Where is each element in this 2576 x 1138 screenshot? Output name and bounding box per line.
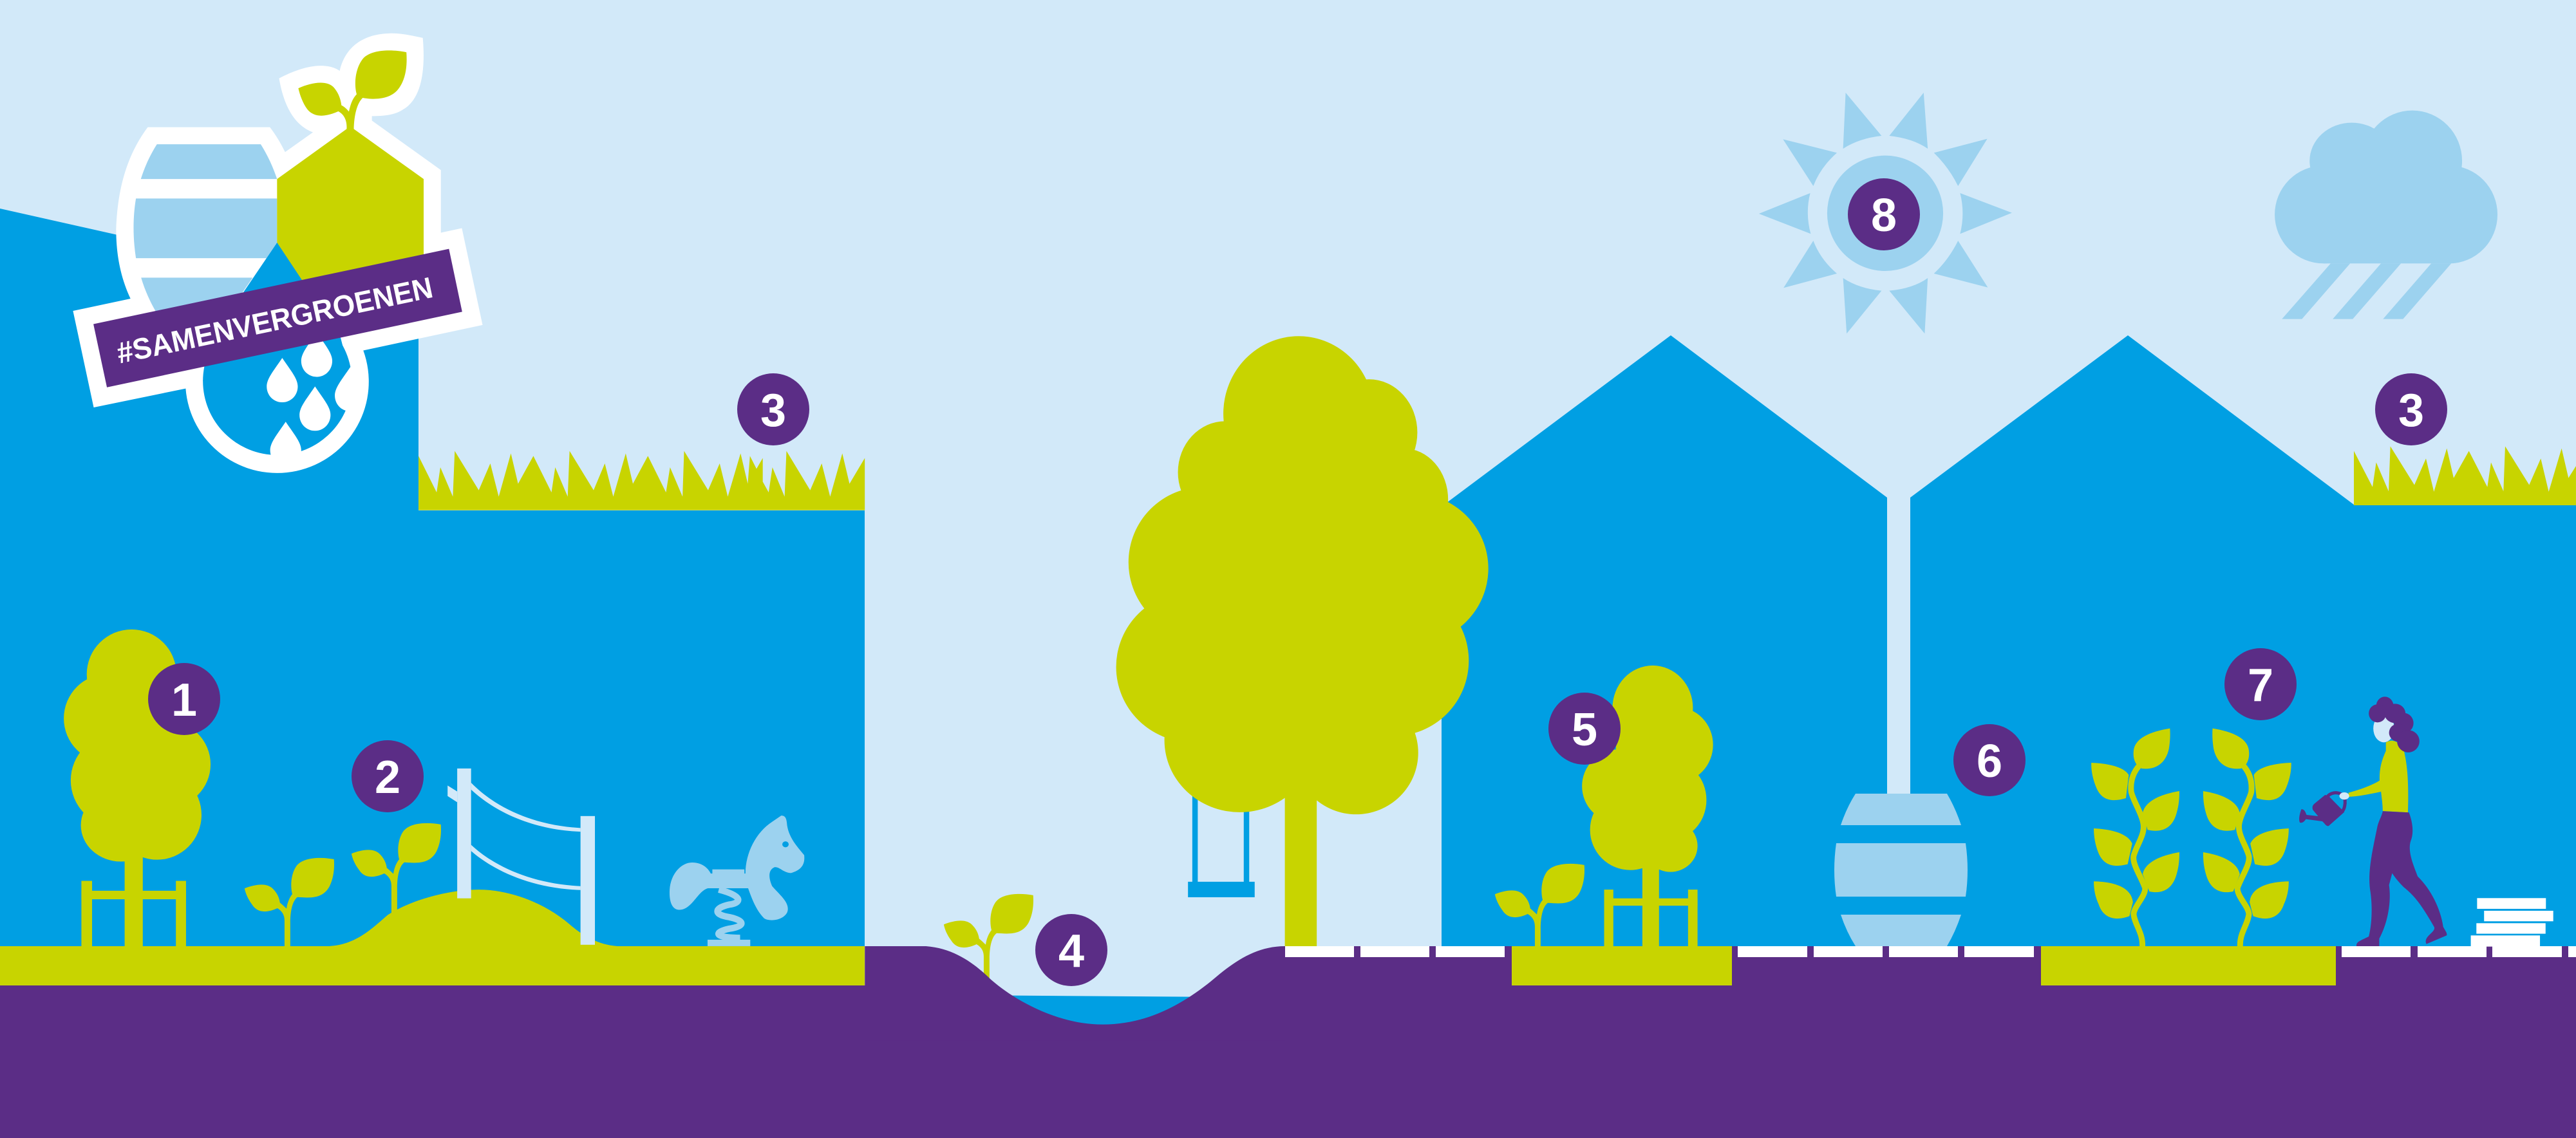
logo small drops [267, 333, 366, 466]
badge 3 right: 3 [2398, 385, 2424, 436]
ditch ground profile [865, 946, 1295, 1041]
logo: barrel, house and water drop with banner [73, 33, 483, 473]
logo barrel bands [133, 144, 277, 312]
planting bed 5 [1512, 946, 1732, 985]
purple soil under left strip [0, 985, 869, 1040]
logo water drop [203, 243, 352, 455]
badge 3 left [737, 373, 809, 445]
badge 6: 6 [1977, 736, 2002, 787]
sprout near tree 5 [1495, 864, 1584, 954]
planting bed 7 [2041, 946, 2336, 985]
left green strip [0, 946, 865, 985]
badge 5: 5 [1572, 704, 1597, 756]
small tree with frame 5 [1582, 666, 1713, 947]
purple soil right [1285, 946, 2576, 1043]
sprout by the ditch [944, 894, 1033, 984]
hill with fence [329, 769, 617, 946]
left blue building [0, 209, 865, 946]
left vine [2091, 729, 2179, 947]
swing [1188, 770, 1255, 897]
white paving stones [1285, 946, 2576, 957]
rain pipe [1887, 498, 1910, 795]
small tree with frame 1 [64, 630, 211, 949]
icon: sun [1759, 93, 2012, 333]
green roof grass right [2354, 446, 2576, 505]
logo banner [93, 249, 462, 387]
badge 8 [1848, 178, 1920, 250]
logo hashtag text: #SAMENVERGROENEN [114, 270, 436, 370]
badge 4 [1035, 914, 1107, 986]
person with watering can [2299, 696, 2447, 946]
big tree [1116, 336, 1489, 946]
badge 2 [352, 740, 424, 812]
badge 7: 7 [2248, 660, 2273, 711]
logo white outline [73, 33, 483, 473]
sprout on hill [352, 823, 441, 913]
badge 5 [1548, 693, 1621, 765]
green roof grass left [418, 451, 865, 510]
sprout near tree 1 [245, 858, 334, 948]
icon: rain cloud [2275, 111, 2497, 319]
badge 3 right [2375, 373, 2447, 445]
icon: rain barrel [1834, 794, 1968, 946]
badge 4: 4 [1058, 926, 1084, 977]
badge 7 [2224, 648, 2297, 720]
water in ditch [1011, 996, 1194, 1028]
right vine [2203, 729, 2291, 947]
right blue houses [1442, 335, 2576, 946]
badge 2: 2 [375, 752, 400, 803]
badge 8: 8 [1871, 190, 1897, 241]
climbing plants [2091, 729, 2291, 947]
logo house with sprout [277, 50, 424, 283]
badge 3 left: 3 [760, 385, 786, 436]
stack of white paving stones [2471, 898, 2553, 947]
purple soil [0, 1036, 2576, 1138]
icon: spring rider horse [670, 816, 804, 946]
badge 1 [148, 663, 220, 735]
badge 1: 1 [171, 675, 197, 726]
badge 6 [1953, 724, 2026, 796]
